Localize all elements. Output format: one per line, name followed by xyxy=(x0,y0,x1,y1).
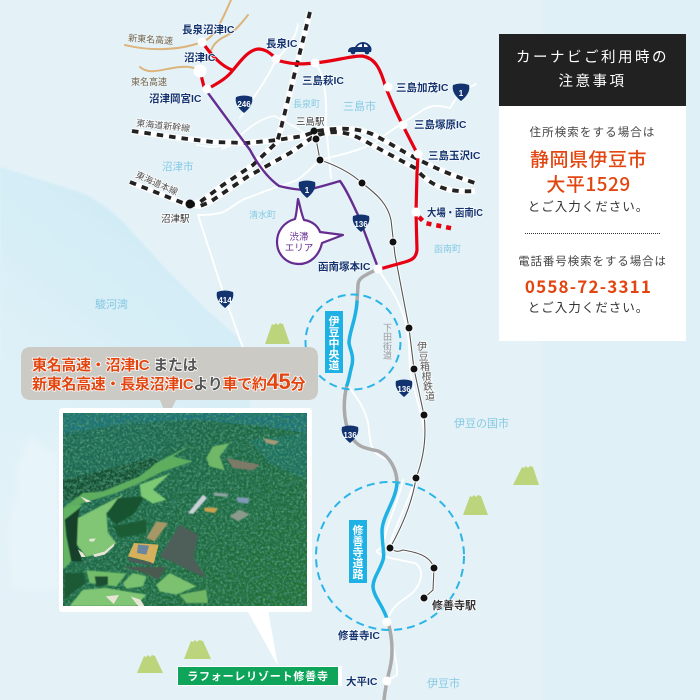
address: 静岡県伊豆市 xyxy=(530,145,647,172)
right background tint xyxy=(542,0,700,700)
purple congestion route xyxy=(208,93,377,265)
panel heading: 注意事項 xyxy=(558,74,626,90)
panel heading: カーナビご利用時の xyxy=(516,50,669,66)
icon: car xyxy=(348,42,372,54)
resort name label xyxy=(177,666,342,686)
station markers xyxy=(186,128,438,602)
town names: 清水町 xyxy=(249,209,276,220)
station names xyxy=(161,116,476,612)
sea: Suruga Bay xyxy=(0,167,250,624)
town names: 伊豆の国市 xyxy=(454,417,509,430)
national road 136 grey / Izu Chuo and Shuzenji roads xyxy=(344,269,397,700)
station names: 修善寺駅 xyxy=(432,598,476,612)
national road shields: 136 xyxy=(397,385,411,394)
IC labels: 函南塚本IC xyxy=(318,260,371,273)
callout: access time: 東名高速・沼津IC または xyxy=(32,356,198,374)
national road shields: 136 xyxy=(354,220,368,229)
photo frame xyxy=(59,408,312,612)
congestion area speech bubble: エリア xyxy=(285,243,313,254)
Izu-Hakone railway xyxy=(316,139,434,598)
Shuzenji road label xyxy=(349,520,367,583)
IC labels: 三島塚原IC xyxy=(414,118,467,131)
railway lines: Shinkansen, Gotemba and Tokaido xyxy=(130,12,475,206)
phone number: 0558-72-3311 xyxy=(525,273,652,298)
station names: 沼津駅 xyxy=(161,214,190,225)
road and railway names: 東名高速 xyxy=(131,76,167,87)
dashed circle: Shuzenji road area xyxy=(316,482,464,630)
town names: 函南町 xyxy=(434,243,461,254)
IC labels: 修善寺IC xyxy=(338,629,380,642)
national road shields: 246 xyxy=(237,100,251,109)
national road shields: 1 xyxy=(459,89,464,98)
national road shields xyxy=(217,84,469,443)
pointer to resort xyxy=(247,610,278,666)
road and railway names: 東海道新幹線 xyxy=(136,117,191,134)
callout: access time: 新東名高速・長泉沼津ICより車で約45分 xyxy=(32,369,306,394)
IC labels: 長泉沼津IC xyxy=(182,23,235,36)
panel: car navigation notes xyxy=(499,34,686,341)
road and railway names: 東海道本線 xyxy=(134,169,180,197)
IC labels: 長泉IC xyxy=(266,37,298,50)
IC labels: 大平IC xyxy=(346,675,378,688)
panel heading xyxy=(499,34,686,106)
resort name label: ラフォーレリゾート修善寺 xyxy=(187,669,329,683)
address xyxy=(530,145,647,197)
IC labels xyxy=(149,23,483,688)
photo: aerial view of resort xyxy=(63,413,307,606)
town names: 長泉町 xyxy=(293,98,320,109)
address search intro: 住所検索をする場合は xyxy=(530,127,656,139)
road and railway names: 下田街道 xyxy=(383,323,392,360)
mountains xyxy=(137,323,539,673)
address: 大平1529 xyxy=(546,170,631,197)
national road shields: 136 xyxy=(343,431,357,440)
dotted divider xyxy=(525,233,660,234)
station names: 三島駅 xyxy=(296,116,325,128)
town names: 沼津市 xyxy=(162,160,194,173)
IC labels: 沼津岡宮IC xyxy=(149,92,202,105)
congestion area speech bubble xyxy=(277,199,343,264)
interchange markers xyxy=(194,38,422,686)
IC labels: 大場・函南IC xyxy=(427,206,483,219)
phone search intro: 電話番号検索をする場合は xyxy=(518,256,667,268)
Shuzenji road label: 修善寺道路 xyxy=(352,523,364,581)
town names: 伊豆市 xyxy=(427,677,460,690)
road and railway names: 新東名高速 xyxy=(128,32,174,46)
red expressway xyxy=(201,46,455,269)
congestion area speech bubble: 渋滞 xyxy=(289,231,309,243)
town names: 駿河湾 xyxy=(95,297,128,311)
IC labels: 三島玉沢IC xyxy=(428,149,481,162)
Izu Chuo road label xyxy=(325,311,343,373)
road and railway names xyxy=(128,32,435,403)
IC labels: 三島加茂IC xyxy=(396,81,449,94)
town names: 三島市 xyxy=(343,99,376,113)
white local roads xyxy=(197,24,476,681)
IC labels: 三島萩IC xyxy=(302,74,344,87)
address suffix: とご入力ください。 xyxy=(528,200,649,214)
phone suffix: とご入力ください。 xyxy=(528,301,649,315)
national road shields: 414 xyxy=(218,296,232,305)
dashed circle: Izu Chuo road area xyxy=(306,294,400,390)
town names xyxy=(95,98,509,690)
Izu Chuo road label: 伊豆中央道 xyxy=(328,314,340,372)
road and railway names: 伊豆箱根鉄道 xyxy=(417,341,435,403)
IC labels: 沼津IC xyxy=(184,51,216,64)
brown expressways xyxy=(125,0,248,71)
national road shields: 1 xyxy=(305,186,310,195)
callout: access time xyxy=(21,347,318,418)
